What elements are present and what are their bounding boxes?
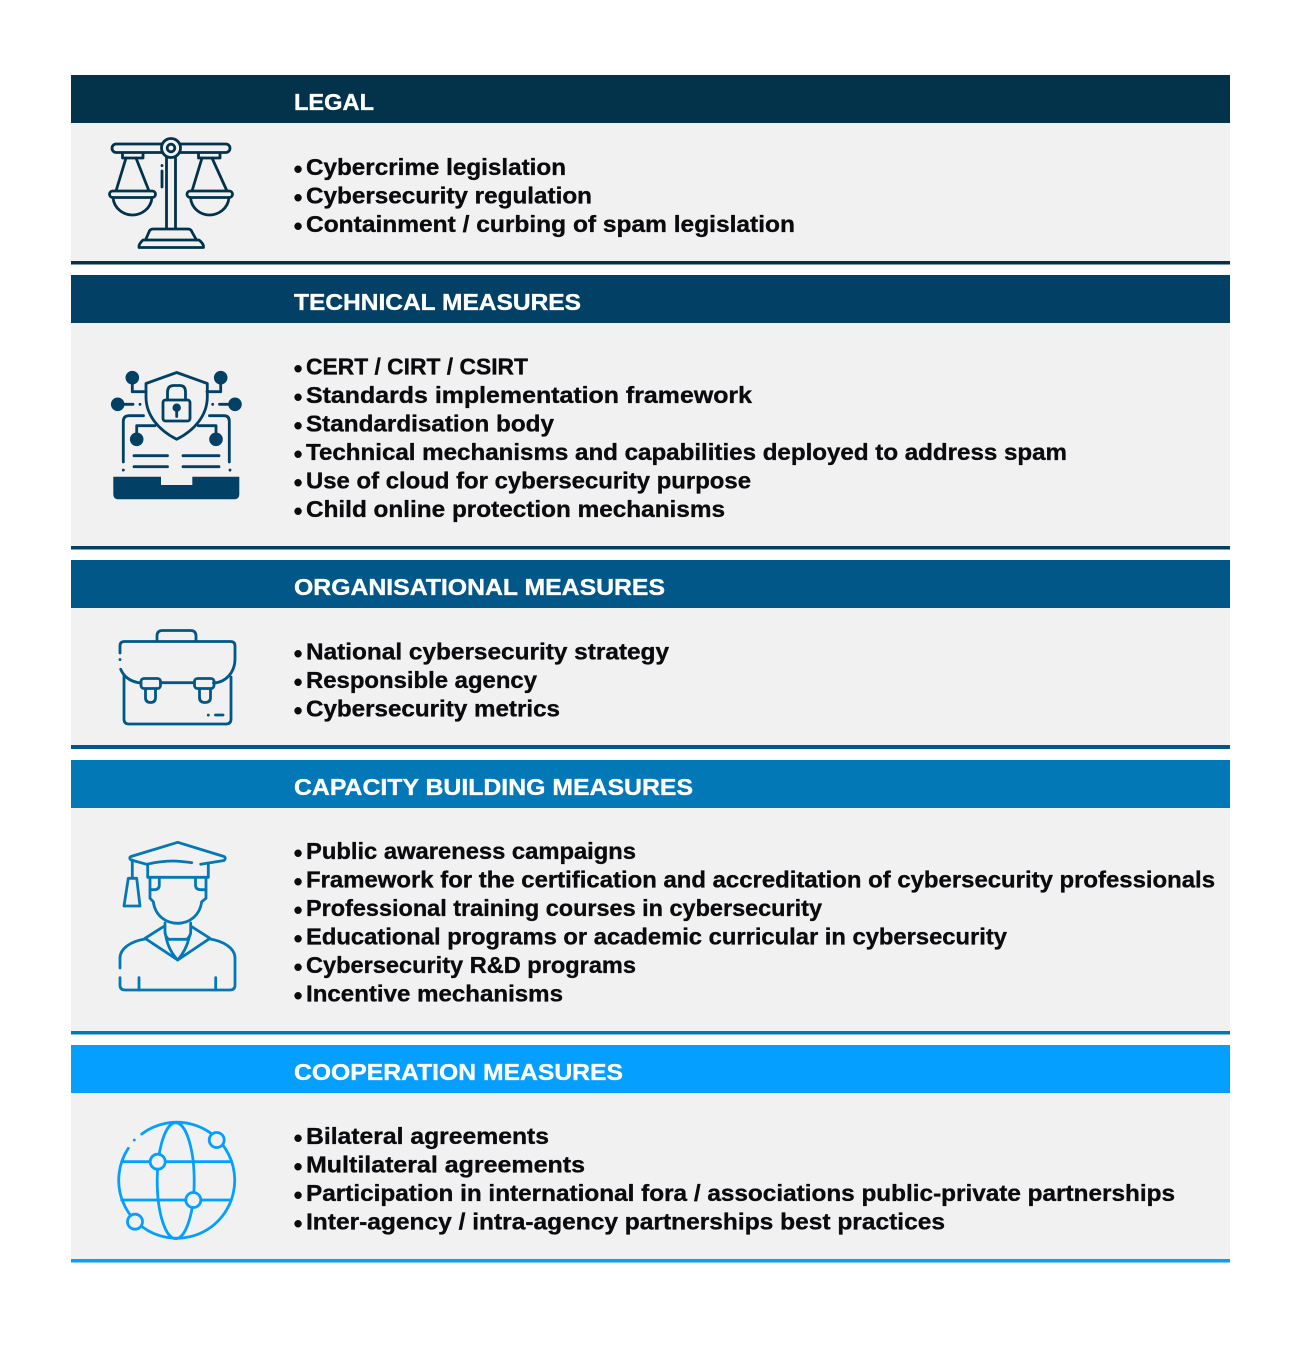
list: technical measures: • <box>294 467 303 497</box>
list: organisational measures: National cybersecurity strategy <box>306 638 669 664</box>
list: organisational measures: Cybersecurity metrics <box>306 696 560 722</box>
icon: scales of justice <box>110 138 232 248</box>
list: capacity building measures: • <box>294 980 303 1010</box>
panel: legal <box>71 75 1230 264</box>
list: capacity building measures: Cybersecurity R&D programs <box>306 952 636 978</box>
list: legal: • <box>294 211 303 241</box>
icon: briefcase <box>120 630 235 724</box>
list: cooperation measures: Bilateral agreements <box>306 1123 549 1149</box>
icon: globe network <box>119 1122 235 1239</box>
list: capacity building measures: Public awareness campaigns <box>306 838 636 864</box>
list: organisational measures: Responsible agency <box>306 667 537 693</box>
list: legal: Containment / curbing of spam legislation <box>306 211 795 237</box>
list: cooperation measures: • <box>294 1180 303 1210</box>
list: cooperation measures: • <box>294 1208 303 1238</box>
list: cooperation measures: Inter-agency / intra-agency partnerships best practices <box>306 1208 945 1234</box>
icon: graduate <box>120 842 235 990</box>
capacity building header bar <box>71 760 1230 808</box>
list: legal: Cybercrime legislation <box>306 154 566 180</box>
heading: organisational measures: ORGANISATIONAL MEASURES <box>294 574 665 600</box>
list: technical measures: • <box>294 353 303 383</box>
heading: capacity building measures: CAPACITY BUILDING MEASURES <box>294 774 693 800</box>
list: technical measures: • <box>294 439 303 469</box>
list: capacity building measures: • <box>294 866 303 896</box>
list: cooperation measures: • <box>294 1123 303 1153</box>
list: technical measures: Technical mechanisms and capabilities deployed to address spam <box>306 439 1067 465</box>
list: capacity building measures: Professional training courses in cybersecurity <box>306 895 822 921</box>
list: technical measures: • <box>294 410 303 440</box>
organisational header bar <box>71 560 1230 608</box>
list: capacity building measures: Educational programs or academic curricular in cybersecurity <box>306 924 1007 950</box>
list: organisational measures: • <box>294 638 303 668</box>
heading: cooperation measures: COOPERATION MEASURES <box>294 1059 623 1085</box>
list: capacity building measures: • <box>294 952 303 982</box>
panel: technical measures <box>71 275 1230 550</box>
panel: cooperation measures <box>71 1045 1230 1262</box>
list: technical measures: Child online protection mechanisms <box>306 496 725 522</box>
list: organisational measures: • <box>294 696 303 726</box>
list: cooperation measures: Participation in international fora / associations public-private partnerships <box>306 1180 1175 1206</box>
heading: legal: LEGAL <box>294 89 374 115</box>
legal header bar <box>71 75 1230 123</box>
list: cooperation measures: Multilateral agreements <box>306 1152 585 1178</box>
list: capacity building measures: Framework for the certification and accreditation of cybersecurity professionals <box>306 866 1215 892</box>
list: legal: • <box>294 182 303 212</box>
list: technical measures: Standardisation body <box>306 410 554 436</box>
cooperation header bar <box>71 1045 1230 1093</box>
list: capacity building measures: • <box>294 838 303 868</box>
list: technical measures: Standards implementation framework <box>306 382 752 408</box>
heading: technical measures: TECHNICAL MEASURES <box>294 289 581 315</box>
list: capacity building measures: • <box>294 895 303 925</box>
list: organisational measures: • <box>294 667 303 697</box>
panel: capacity building measures <box>71 760 1230 1034</box>
list: capacity building measures: • <box>294 924 303 954</box>
technical header bar <box>71 275 1230 323</box>
list: organisational measures <box>294 638 669 726</box>
list: legal <box>294 154 795 241</box>
list: capacity building measures <box>294 838 1215 1010</box>
list: technical measures: • <box>294 382 303 412</box>
list: technical measures: Use of cloud for cybersecurity purpose <box>306 467 751 493</box>
list: cooperation measures: • <box>294 1152 303 1182</box>
list: technical measures <box>294 353 1067 526</box>
list: legal: • <box>294 154 303 184</box>
list: cooperation measures <box>294 1123 1175 1238</box>
icon: shield and laptop <box>112 372 240 499</box>
list: legal: Cybersecurity regulation <box>306 182 592 208</box>
list: technical measures: CERT / CIRT / CSIRT <box>306 353 528 379</box>
list: capacity building measures: Incentive mechanisms <box>306 980 563 1006</box>
list: technical measures: • <box>294 496 303 526</box>
panel: organisational measures <box>71 560 1230 749</box>
